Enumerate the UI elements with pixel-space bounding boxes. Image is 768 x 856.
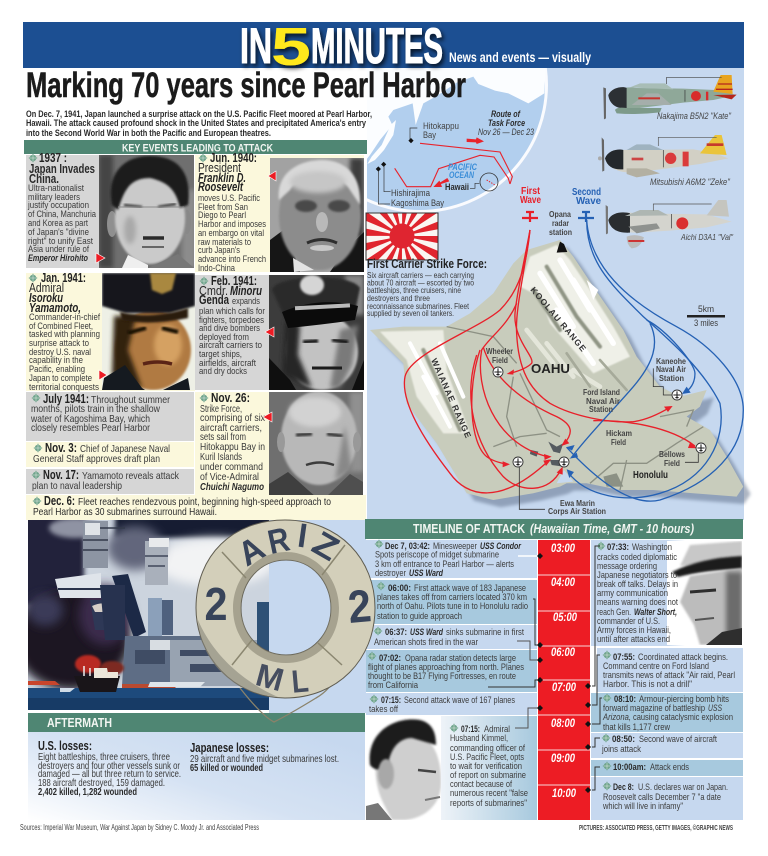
timeline entry: 08:10: that kills 1,177 crew bbox=[603, 721, 670, 732]
panel: Dec. 6: Dec. 6: bbox=[44, 493, 75, 508]
panel: Jun. 1940: Franklin D. bbox=[198, 170, 246, 185]
panel: 1937: justify occupation bbox=[27, 200, 89, 211]
timeline entry: 07:15 Kimmel: Admiral bbox=[484, 723, 510, 734]
ring lettering: L bbox=[290, 662, 310, 700]
panel: July 1941: July 1941: bbox=[43, 391, 89, 406]
panel: Nov. 26: Kuril Islands bbox=[200, 451, 242, 463]
map labels: OAHU bbox=[531, 361, 570, 376]
panel: Nov. 17: plan to naval leadership bbox=[32, 480, 122, 492]
heading band: timeline: TIMELINE OF ATTACK bbox=[413, 522, 525, 536]
map labels: Corps Air Station bbox=[548, 507, 606, 516]
panel: Feb. 1941: target ships, bbox=[199, 349, 242, 360]
timeline entry: 07:02: Opana radar station detects large bbox=[405, 652, 516, 663]
panel: Feb. 1941: fighters, torpedoes bbox=[199, 315, 264, 326]
panel: Dec. 6: Fleet reaches rendezvous point, beginning high-speed approach to bbox=[78, 496, 331, 508]
timeline entry: 06:00: planes takes off from carriers located 370 km bbox=[377, 591, 527, 602]
timeline entry: Dec 7 03:42: Dec 7, 03:42: bbox=[385, 540, 430, 551]
intro text bbox=[26, 109, 372, 139]
panel: Feb. 1941: Feb. 1941: bbox=[211, 273, 257, 288]
aircraft captions: Mitsubishi A6M2 "Zeke" bbox=[650, 176, 731, 187]
map labels: Field bbox=[611, 438, 626, 447]
panel: 1937: 1937 : bbox=[39, 150, 67, 165]
panel: Nov. 3: Chief of Japanese Naval bbox=[80, 443, 170, 455]
timeline entry: Dec 8: which will live in infamy" bbox=[602, 800, 683, 811]
timeline entry: 07:55: Coordinated attack begins. bbox=[638, 651, 728, 662]
scale bar bbox=[687, 303, 725, 328]
photo: Admiral Kimmel bbox=[366, 716, 441, 820]
map labels: KOOLAU RANGE bbox=[528, 285, 589, 354]
panel: losses bbox=[28, 732, 365, 820]
panel: Jun. 1940: Fleet from San bbox=[198, 202, 248, 213]
panel: Jan. 1941: Yamamoto, bbox=[29, 300, 81, 315]
timeline entry: Dec 8: U.S. declares war on Japan. bbox=[638, 781, 728, 792]
timeline entry: 10:00am: 10:00am: bbox=[613, 761, 646, 772]
timeline entry: 07:15 Kimmel bbox=[366, 716, 537, 820]
panel: Feb. 1941: airfields, aircraft bbox=[199, 358, 256, 369]
timeline entry: 07:33 Short: Japanese negotiators to bbox=[597, 569, 677, 580]
map labels: Ford Island bbox=[583, 388, 620, 397]
timeline entry: 07:33 Short: Walter Short, bbox=[634, 606, 677, 617]
panel: Jan. 1941: Admiral bbox=[29, 280, 64, 295]
title: Marking 70 years since Pearl Harbor bbox=[26, 66, 466, 105]
timeline entry: 07:15 Kimmel: numerous recent "false bbox=[450, 787, 528, 798]
mountain texture bbox=[520, 245, 630, 373]
ring lettering: I bbox=[295, 517, 310, 556]
life ring: USS Arizona bbox=[196, 517, 375, 722]
globe labels: Kagoshima Bay bbox=[391, 197, 444, 208]
timeline entry: 07:33 Short: until after attacks end bbox=[597, 633, 670, 644]
intro text: into the Second World War in both the Pacific and European theatres. bbox=[26, 128, 271, 139]
panel: Jan. 1941 bbox=[26, 270, 195, 393]
panel: Dec. 6: Pearl Harbor as 30 submarines surround Hawaii. bbox=[33, 506, 217, 518]
text: U.S. losses: Eight battleships, three cruisers, three bbox=[38, 752, 170, 763]
map labels: Hickam bbox=[606, 429, 632, 438]
text: Japanese losses: 65 killed or wounded bbox=[190, 763, 263, 774]
footer: sources: Sources: Imperial War Museum, War Against Japan by Sidney C. Moody Jr. and Associated Press bbox=[20, 823, 259, 832]
timeline: red hour bar: 10:00 bbox=[552, 786, 576, 800]
timeline entry: 07:33 Short: reach Gen. bbox=[597, 606, 631, 617]
logo: In 5 Minutes bbox=[240, 17, 443, 77]
Opana radar icon bbox=[557, 242, 567, 253]
timeline entry: 06:37: sinks submarine in first bbox=[446, 626, 524, 637]
timeline entry: 07:55: Harbor. This is not a drill" bbox=[603, 678, 692, 689]
text: First Carrier Strike Force: about 70 aircraft — escorted by two bbox=[367, 278, 474, 288]
labels: first and second wave: radar bbox=[552, 219, 569, 228]
heading band: timeline: (Hawaiian Time, GMT - 10 hours) bbox=[530, 522, 694, 536]
timeline entry: 06:37: American shots fired in the war bbox=[374, 636, 478, 647]
timeline entry: 07:33 Short: message ordering bbox=[597, 560, 657, 571]
timeline entry: 07:33 Short: Washington bbox=[632, 541, 672, 552]
timeline entry: 08:10: Armour-piercing bomb hits bbox=[639, 693, 729, 704]
timeline entry: 08:10: 08:10: bbox=[614, 693, 636, 704]
globe labels: Task Force bbox=[488, 117, 525, 128]
timeline entry: 07:15 Kimmel: commanding officer of bbox=[450, 742, 525, 753]
panel: Nov. 3: General Staff approves draft plan bbox=[33, 453, 160, 465]
timeline entry: 08:50: joins attack bbox=[601, 743, 641, 754]
panel: Jun. 1940 bbox=[195, 150, 364, 274]
photo: Emperor Hirohito bbox=[99, 155, 196, 268]
text: Japanese losses bbox=[190, 741, 339, 774]
timeline entry: 07:33 Short: 07:33: bbox=[607, 541, 629, 552]
timeline entry: 07:02: 07:02: bbox=[379, 652, 401, 663]
heading band: aftermath: AFTERMATH bbox=[47, 715, 112, 730]
panel: 1937: Ultra-nationalist bbox=[28, 183, 84, 194]
timeline entry: 07:33 Short: commander of U.S. bbox=[597, 615, 660, 626]
intro text: Hawaii. The attack caused profound shock in the United States and precipitated America's entry bbox=[26, 118, 367, 129]
blue attack routes bbox=[567, 220, 743, 501]
timeline entry: 07:15 Kimmel: 07:15: bbox=[461, 723, 480, 734]
header banner: News and events — visually bbox=[449, 49, 591, 65]
globe labels: Nov 26 — Dec 23 bbox=[478, 126, 535, 137]
timeline entry: 08:10: Arizona, bbox=[602, 711, 631, 722]
ring lettering: A bbox=[232, 529, 271, 574]
road lines bbox=[447, 327, 703, 490]
timeline entry: 07:15 Kimmel: contact because of bbox=[450, 778, 512, 789]
text: U.S. losses: 2,402 killed, 1,282 wounded bbox=[38, 787, 137, 798]
timeline entry: 07:33 Short: army communication bbox=[597, 587, 668, 598]
globe labels: OCEAN bbox=[449, 170, 474, 180]
panel: Jun. 1940: Indo-China bbox=[198, 263, 236, 274]
logo: In 5 Minutes: IN bbox=[240, 18, 272, 74]
timeline entry: 06:00: north of Oahu. Pilots tune in to Honolulu radio bbox=[377, 600, 528, 611]
timeline entry: 06:37 bbox=[366, 625, 537, 649]
timeline entry: 08:50 bbox=[591, 733, 743, 758]
timeline entry: Dec 7 03:42: destroyer bbox=[375, 567, 406, 578]
panel: Jun. 1940: Diego to Pearl bbox=[198, 210, 246, 221]
timeline entry: 06:37: 06:37: bbox=[385, 626, 407, 637]
timeline entry: 07:33 Short: Army forces in Hawaii, bbox=[597, 624, 671, 635]
heading band: aftermath bbox=[28, 713, 365, 732]
panel: Nov. 26: Nov. 26: bbox=[211, 390, 250, 405]
Pearl Harbor bbox=[530, 442, 563, 467]
panel: Nov. 26: comprising of six bbox=[200, 412, 266, 424]
timeline entry: Dec 8 bbox=[591, 777, 743, 820]
panel: Jan. 1941: Pacific, enabling bbox=[29, 364, 85, 375]
panel: 1937: of China, Manchuria bbox=[28, 209, 97, 220]
panel: Nov. 3: Nov. 3: bbox=[45, 440, 77, 455]
labels: first and second wave: Wave bbox=[520, 195, 541, 206]
heading band: key events: KEY EVENTS LEADING TO ATTACK bbox=[122, 142, 273, 154]
timeline entry: Dec 7 03:42: Minesweeper bbox=[433, 540, 477, 551]
panel: Dec. 6 bbox=[26, 493, 366, 520]
heading band: timeline bbox=[365, 519, 743, 539]
ring lettering: Z bbox=[306, 524, 345, 569]
panel: July 1941 bbox=[26, 391, 194, 441]
timeline entry: 07:33 Short: break off talks. Delays in bbox=[597, 578, 678, 589]
panel: Feb. 1941: aircraft carriers to bbox=[199, 340, 262, 351]
map: Oahu island bbox=[370, 220, 751, 516]
timeline entry: 07:33 Short bbox=[591, 540, 743, 646]
panel: Jun. 1940: an embargo on vital bbox=[198, 228, 264, 239]
timeline entry: Dec 7 03:42: USS Condor bbox=[480, 540, 522, 551]
scale bar: 5km bbox=[698, 303, 714, 314]
timeline entry: 08:10: causing cataclysmic explosion bbox=[633, 711, 733, 722]
panel: Nov. 26: of Vice-Admiral bbox=[200, 471, 259, 483]
panel: Jan. 1941: Japan to complete bbox=[29, 373, 92, 384]
aircraft captions: Aichi D3A1 "Val" bbox=[680, 232, 734, 242]
timeline connectors and markers bbox=[488, 546, 602, 793]
panel: Jan. 1941: surprise attack to bbox=[29, 338, 89, 349]
timeline: red hour bar bbox=[538, 540, 590, 820]
labels: first and second wave bbox=[520, 186, 601, 237]
map labels: Field bbox=[664, 459, 680, 468]
text: U.S. losses bbox=[38, 739, 181, 798]
timeline entry: 07:15 second wave bbox=[366, 693, 537, 715]
map labels bbox=[429, 285, 686, 516]
labels: first and second wave: First bbox=[521, 186, 541, 197]
timeline entry: 07:15 Kimmel: to wait for verification bbox=[450, 760, 522, 771]
panel: 1937: of Japan's "divine bbox=[28, 227, 89, 238]
panel: Nov. 17: Nov. 17: bbox=[43, 467, 79, 482]
timeline entry: 07:02: thought to be B17 Flying Fortresses, en route bbox=[368, 670, 516, 681]
timeline entry: Dec 8: Dec 8: bbox=[613, 781, 634, 792]
panel: Feb. 1941: plan which calls for bbox=[199, 306, 266, 317]
timeline entry: 07:55 bbox=[597, 648, 743, 692]
timeline entry: 10:00am: Attack ends bbox=[650, 761, 689, 772]
panel: Jan. 1941: Commander-in-chief bbox=[29, 312, 100, 323]
logo: In 5 Minutes: MINUTES bbox=[311, 18, 443, 74]
labels: first and second wave: station bbox=[549, 228, 572, 237]
red attack routes bbox=[404, 230, 695, 493]
aftermath panel background bbox=[269, 520, 366, 713]
timeline entry: Dec 7 03:42: Spots periscope of midget submarine bbox=[375, 548, 499, 560]
text: First Carrier Strike Force: supplied by seven oil tankers. bbox=[367, 308, 454, 318]
labels: first and second wave: Wave bbox=[576, 196, 601, 207]
panel: Jun. 1940: Jun. 1940: bbox=[210, 150, 257, 165]
panel: Jun. 1940: curb Japan's bbox=[198, 245, 240, 256]
panel: Jan. 1941: of Combined Fleet, bbox=[29, 321, 93, 332]
island shadow bbox=[377, 247, 751, 507]
timeline: red hour bar: 07:00 bbox=[552, 680, 576, 694]
timeline entry: 07:15 second wave: Second attack wave of 167 planes bbox=[404, 694, 515, 705]
map labels: Ewa Marin bbox=[560, 499, 595, 508]
timeline entry: 06:00 bbox=[366, 580, 537, 624]
ring lettering: 2 bbox=[346, 579, 373, 633]
panel: Nov. 26: sets sail from bbox=[200, 431, 246, 443]
panel: Nov. 26: aircraft carriers, bbox=[200, 422, 262, 434]
panel: Jan. 1941: territorial conquests bbox=[29, 382, 99, 393]
panel: Nov. 26 bbox=[195, 390, 364, 498]
panel: Nov. 17: Yamamoto reveals attack bbox=[82, 470, 180, 482]
panel: Jun. 1940: moves U.S. Pacific bbox=[198, 193, 260, 204]
panel: Feb. 1941: Genda bbox=[199, 292, 230, 307]
logo: In 5 Minutes: 5 bbox=[271, 17, 311, 77]
panel: Jan. 1941: destroy U.S. naval bbox=[29, 347, 91, 358]
panel: Feb. 1941: expands bbox=[232, 296, 260, 307]
text: First Carrier Strike Force: battleships, three cruisers, nine bbox=[367, 285, 461, 295]
airfield markers bbox=[493, 367, 706, 467]
timeline entry: 07:15 Kimmel: U.S. Pacific Fleet, opts bbox=[450, 751, 524, 762]
map labels: Wheeler bbox=[486, 347, 513, 356]
intro text: On Dec. 7, 1941, Japan launched a surprise attack on the U.S. Pacific Fleet moored at Pearl Harbor, bbox=[26, 109, 372, 120]
heading band: key events bbox=[24, 140, 367, 154]
panel: Jun. 1940: advance into French bbox=[198, 254, 266, 265]
text: First Carrier Strike Force: First Carrier Strike Force: bbox=[367, 257, 487, 271]
timeline entry: 08:50: 08:50: bbox=[612, 733, 635, 744]
timeline entry: 10:00am bbox=[591, 760, 743, 776]
leader lines bbox=[519, 368, 698, 509]
photo: Franklin D. Roosevelt bbox=[270, 158, 364, 272]
timeline entry: 07:55: 07:55: bbox=[613, 651, 635, 662]
timeline entry: 07:15 second wave: takes off bbox=[369, 703, 398, 714]
panel: 1937: military leaders bbox=[28, 192, 80, 203]
text: Japanese losses: 29 aircraft and five midget submarines lost. bbox=[190, 754, 339, 765]
aircraft captions bbox=[650, 110, 734, 242]
timeline entry: 07:02 bbox=[366, 650, 537, 692]
timeline entry: 08:10: forward magazine of battleship bbox=[603, 702, 705, 713]
route of task force bbox=[395, 143, 512, 187]
text: First Carrier Strike Force bbox=[367, 257, 487, 318]
text: U.S. losses: destroyers and four other vessels sunk or bbox=[38, 761, 180, 772]
header banner bbox=[23, 17, 744, 77]
photo: Vice-Admiral Nagumo bbox=[269, 391, 364, 497]
timeline entry: 08:10 bbox=[591, 693, 743, 732]
photo: USS Arizona battleship bbox=[28, 520, 269, 710]
timeline entry: Dec 7 03:42: 3 km off entrance to Pearl Harbor — alerts bbox=[375, 558, 514, 569]
globe labels: Bay bbox=[423, 130, 436, 140]
ring lettering: M bbox=[252, 656, 288, 698]
labels: first and second wave: Second bbox=[572, 187, 601, 198]
panel: Jun. 1940: Harbor and imposes bbox=[198, 219, 266, 230]
panel: 1937 bbox=[26, 150, 196, 268]
panel: July 1941: months, pilots train in the shallow bbox=[31, 403, 160, 415]
timeline entry: 07:15 second wave: 07:15: bbox=[381, 694, 401, 705]
land: Asia and Alaska bbox=[367, 68, 545, 158]
timeline entry: 08:10: USS bbox=[708, 702, 723, 713]
panel: July 1941: closely resembles Pearl Harbor bbox=[31, 422, 150, 434]
timeline entry: 07:15 Kimmel: reports of submarines" bbox=[450, 797, 527, 808]
panel: Feb. 1941 bbox=[195, 273, 364, 390]
icon: Mitsubishi A6M2 Zeke bbox=[598, 135, 728, 177]
timeline: red hour bar: 06:00 bbox=[551, 645, 575, 659]
timeline entry: 07:55: transmits news of attack "Air raid, Pearl bbox=[603, 669, 735, 680]
panel: Feb. 1941: Cmdr. bbox=[199, 283, 228, 298]
timeline entry: 08:50: Second wave of aircraft bbox=[639, 733, 717, 744]
panel: 1937: Asia under rule of bbox=[28, 244, 89, 255]
photo: Cmdr. Genda bbox=[269, 275, 364, 390]
globe labels: Hawaii bbox=[445, 181, 469, 192]
icon: Nakajima B5N2 Kate bbox=[603, 75, 737, 119]
photo: General Walter Short bbox=[667, 541, 742, 645]
timeline: red hour bar: 09:00 bbox=[551, 751, 575, 765]
aircraft captions: Nakajima B5N2 "Kate" bbox=[657, 110, 732, 121]
timeline entry: 07:02: from California bbox=[368, 679, 419, 690]
land: Japan bbox=[367, 120, 396, 164]
text: First Carrier Strike Force: reconnaissance submarines. Fleet bbox=[367, 301, 469, 311]
panel: Jun. 1940: Roosevelt bbox=[198, 179, 243, 194]
island land bbox=[370, 240, 743, 500]
panel: Feb. 1941: Minoru bbox=[230, 283, 262, 298]
timeline entry: 06:00: station to guide approach bbox=[377, 610, 462, 621]
panel: Nov. 26: Strike Force, bbox=[200, 403, 242, 415]
timeline: red hour bar: 04:00 bbox=[551, 575, 575, 589]
map labels: Honolulu bbox=[633, 470, 668, 481]
timeline: red hour bar: 08:00 bbox=[551, 716, 575, 730]
map labels: Station bbox=[659, 374, 684, 383]
timeline entry: Dec 7 03:42: USS Ward bbox=[409, 567, 443, 578]
timeline entry: Dec 7 03:42 bbox=[366, 540, 537, 578]
photo: Admiral Yamamoto bbox=[102, 273, 195, 390]
globe inset map bbox=[367, 68, 548, 212]
panel: Jan. 1941: Jan. 1941: bbox=[41, 270, 86, 285]
panel: Feb. 1941: and dry docks bbox=[199, 366, 247, 377]
panel: Jan. 1941: Isoroku bbox=[29, 290, 63, 305]
map labels: Naval Air bbox=[656, 365, 686, 374]
panel: Nov. 17 bbox=[26, 467, 194, 494]
timeline entry: 07:55: Command centre on Ford Island bbox=[603, 660, 709, 671]
panel: July 1941: water of Kagoshima Bay, which bbox=[30, 413, 150, 425]
panel: Jun. 1940: raw materials to bbox=[198, 237, 251, 248]
panel: July 1941: Throughout summer bbox=[91, 394, 170, 406]
timeline: red hour bar: 05:00 bbox=[553, 610, 577, 624]
timeline: red hour bar: 03:00 bbox=[551, 541, 575, 555]
text: U.S. losses: damaged — all but three return to service. bbox=[38, 769, 181, 780]
timeline entry: 06:00: First attack wave of 183 Japanese bbox=[414, 582, 526, 593]
icon: Aichi D3A1 Val bbox=[606, 200, 732, 248]
timeline entry: Dec 8: Roosevelt calls December 7 "a date bbox=[603, 791, 721, 802]
timeline entry: 06:00: 06:00: bbox=[388, 582, 411, 593]
timeline entry: 07:15 Kimmel: Husband Kimmel, bbox=[450, 732, 508, 743]
panel: Jan. 1941: tasked with planning bbox=[29, 329, 100, 340]
ring lettering: 2 bbox=[204, 578, 228, 630]
panel: Nov. 26: Chuichi Nagumo bbox=[200, 481, 264, 493]
text: U.S. losses: 188 aircraft destroyed, 159 damaged. bbox=[38, 778, 165, 789]
panel: Jun. 1940: President bbox=[198, 160, 241, 175]
text: First Carrier Strike Force: Six aircraft carriers — each carrying bbox=[367, 270, 474, 280]
labels: first and second wave: Opana bbox=[549, 210, 571, 219]
map labels: Station bbox=[589, 405, 613, 414]
timeline entry: 07:33 Short: cracks coded diplomatic bbox=[597, 551, 677, 562]
timeline entry: 07:02: flight of planes approaching from north. Planes bbox=[368, 661, 524, 672]
globe labels: Hitokappu bbox=[423, 121, 459, 131]
panel: 1937: Japan Invades bbox=[29, 161, 95, 176]
map labels: Naval Air bbox=[586, 397, 620, 406]
map labels: Kaneohe bbox=[656, 357, 686, 366]
panel: Nov. 26: under command bbox=[200, 461, 263, 473]
panel: Feb. 1941: and dive bombers bbox=[199, 323, 260, 334]
panel: 1937: Emperor Hirohito bbox=[28, 253, 88, 264]
timeline entry: 07:15 Kimmel: of report on submarine bbox=[450, 769, 526, 780]
panel: 1937: China. bbox=[29, 171, 59, 186]
globe labels bbox=[391, 108, 535, 208]
panel: 1937: right" to unify East bbox=[28, 236, 93, 247]
panel: 1937: and Korea as part bbox=[28, 218, 88, 229]
map labels: Field bbox=[492, 356, 508, 365]
text: Japanese losses: Japanese losses: bbox=[190, 741, 269, 755]
map labels: WAIANAE RANGE bbox=[429, 357, 474, 440]
panel: Nov. 26: Hitokappu Bay in bbox=[200, 441, 265, 453]
ring lettering: R bbox=[264, 520, 293, 562]
timeline entry: 06:37: USS Ward bbox=[410, 626, 443, 637]
panel: Feb. 1941: deployed from bbox=[199, 332, 249, 343]
flag: Rising Sun bbox=[366, 212, 438, 260]
text: U.S. losses: U.S. losses: bbox=[38, 739, 92, 753]
panel: Nov. 3 bbox=[26, 440, 194, 467]
aircraft illustrations bbox=[598, 75, 737, 248]
globe labels: PACIFIC bbox=[448, 162, 477, 172]
ring lettering bbox=[204, 517, 373, 700]
timeline entry: 07:33 Short: means warning does not bbox=[597, 596, 678, 607]
background: blue map panel bbox=[367, 68, 744, 520]
scale bar: 3 miles bbox=[694, 317, 718, 328]
text: First Carrier Strike Force: destroyers and three bbox=[367, 293, 430, 303]
globe labels: Hishirajima bbox=[391, 187, 431, 198]
map labels: Bellows bbox=[659, 450, 685, 459]
globe labels: Route of bbox=[491, 108, 521, 119]
panel: Jan. 1941: capability in the bbox=[29, 355, 83, 366]
